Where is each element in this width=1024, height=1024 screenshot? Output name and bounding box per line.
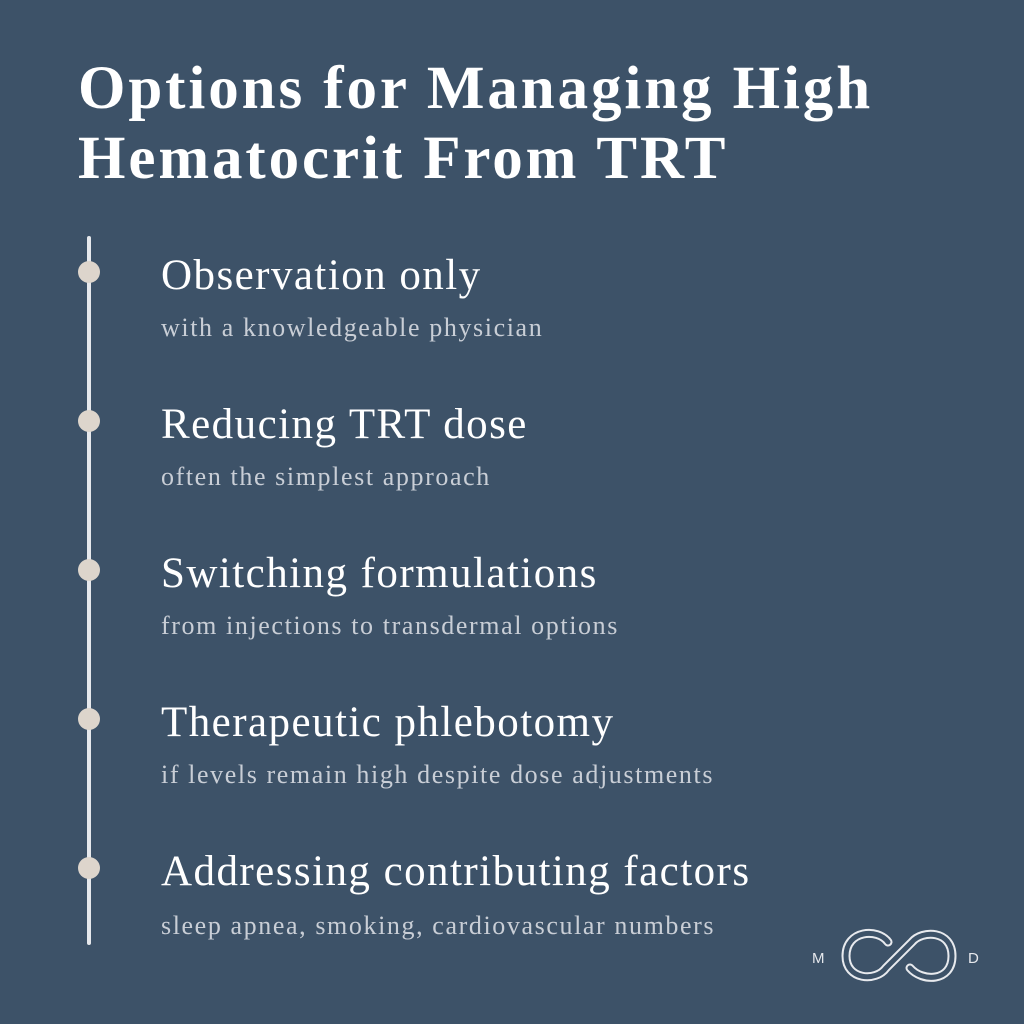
item: observation: with a knowledgeable physician (161, 313, 543, 342)
logo (812, 928, 979, 982)
item: phlebotomy: if levels remain high despite dose adjustments (161, 760, 714, 789)
item: phlebotomy: Therapeutic phlebotomy (161, 699, 614, 746)
title: Options for Managing High (78, 55, 873, 122)
item: contributing factors: sleep apnea, smoking, cardiovascular numbers (161, 911, 715, 940)
timeline line (87, 236, 91, 945)
item: contributing factors: Addressing contributing factors (161, 848, 751, 895)
item: contributing factors (78, 848, 751, 940)
title: Hematocrit From TRT (78, 125, 728, 192)
item: switching formulations (78, 550, 619, 640)
item: reducing dose: often the simplest approach (161, 462, 491, 491)
title (78, 55, 873, 192)
logo: D (968, 950, 979, 967)
item: reducing dose (78, 401, 528, 491)
item: switching formulations: Switching formulations (161, 550, 598, 597)
item: observation: Observation only (161, 252, 482, 299)
logo: M (812, 950, 824, 967)
item: reducing dose: Reducing TRT dose (161, 401, 528, 448)
item: observation (78, 252, 543, 342)
item: switching formulations: from injections to transdermal options (161, 611, 619, 640)
item: phlebotomy (78, 699, 714, 789)
